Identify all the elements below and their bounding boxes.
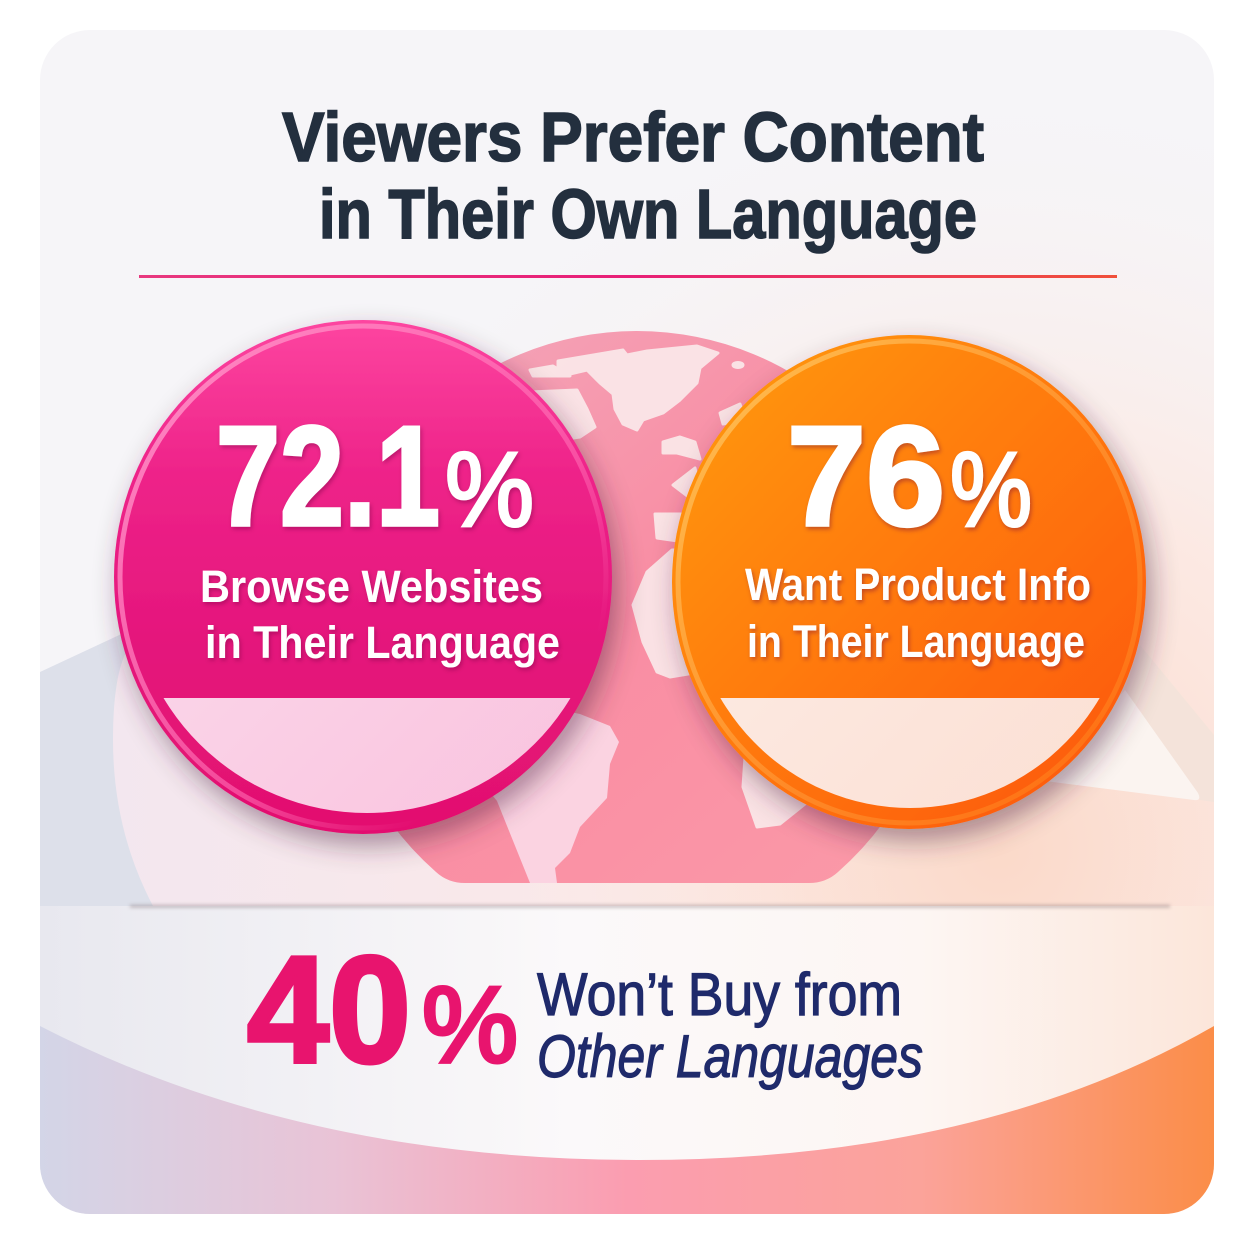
stat circle: 76% product info [672, 335, 1146, 829]
bottom swoosh band [40, 1026, 1214, 1214]
label: browse websites: in Their Language [205, 617, 560, 668]
lower panel of pink circle [164, 698, 570, 813]
title: Viewers Prefer Content [282, 98, 984, 176]
bottom stat: 40%: % [422, 964, 518, 1085]
bottom stat: 40%: 40 [247, 925, 411, 1095]
label: product info: in Their Language [747, 616, 1085, 667]
bottom stat text [537, 961, 923, 1090]
lower white arch [40, 906, 1160, 1160]
title [282, 98, 984, 253]
shelf shadow line [130, 905, 1170, 908]
bottom stat: 40% [247, 925, 518, 1095]
figure 76%: % [950, 431, 1032, 549]
label: product info: Want Product Info [745, 559, 1091, 610]
figure 76% [787, 397, 1032, 556]
figure 72.1%: % [445, 431, 534, 549]
label: browse websites [200, 561, 560, 668]
label: product info [745, 559, 1091, 667]
bottom stat text: Won’t Buy from [537, 961, 902, 1028]
title: in Their Own Language [319, 175, 977, 253]
label: browse websites: Browse Websites [200, 561, 543, 612]
figure 72.1%: 72.1 [216, 397, 440, 556]
stat circle: 72.1% browse websites [114, 320, 612, 834]
lower panel of orange circle [720, 698, 1100, 808]
background speech bubble shapes [40, 630, 1214, 906]
figure 76%: 76 [787, 397, 945, 556]
globe illustration [332, 331, 942, 883]
title divider rule [139, 275, 1117, 278]
bottom stat text: Other Languages [537, 1023, 923, 1090]
